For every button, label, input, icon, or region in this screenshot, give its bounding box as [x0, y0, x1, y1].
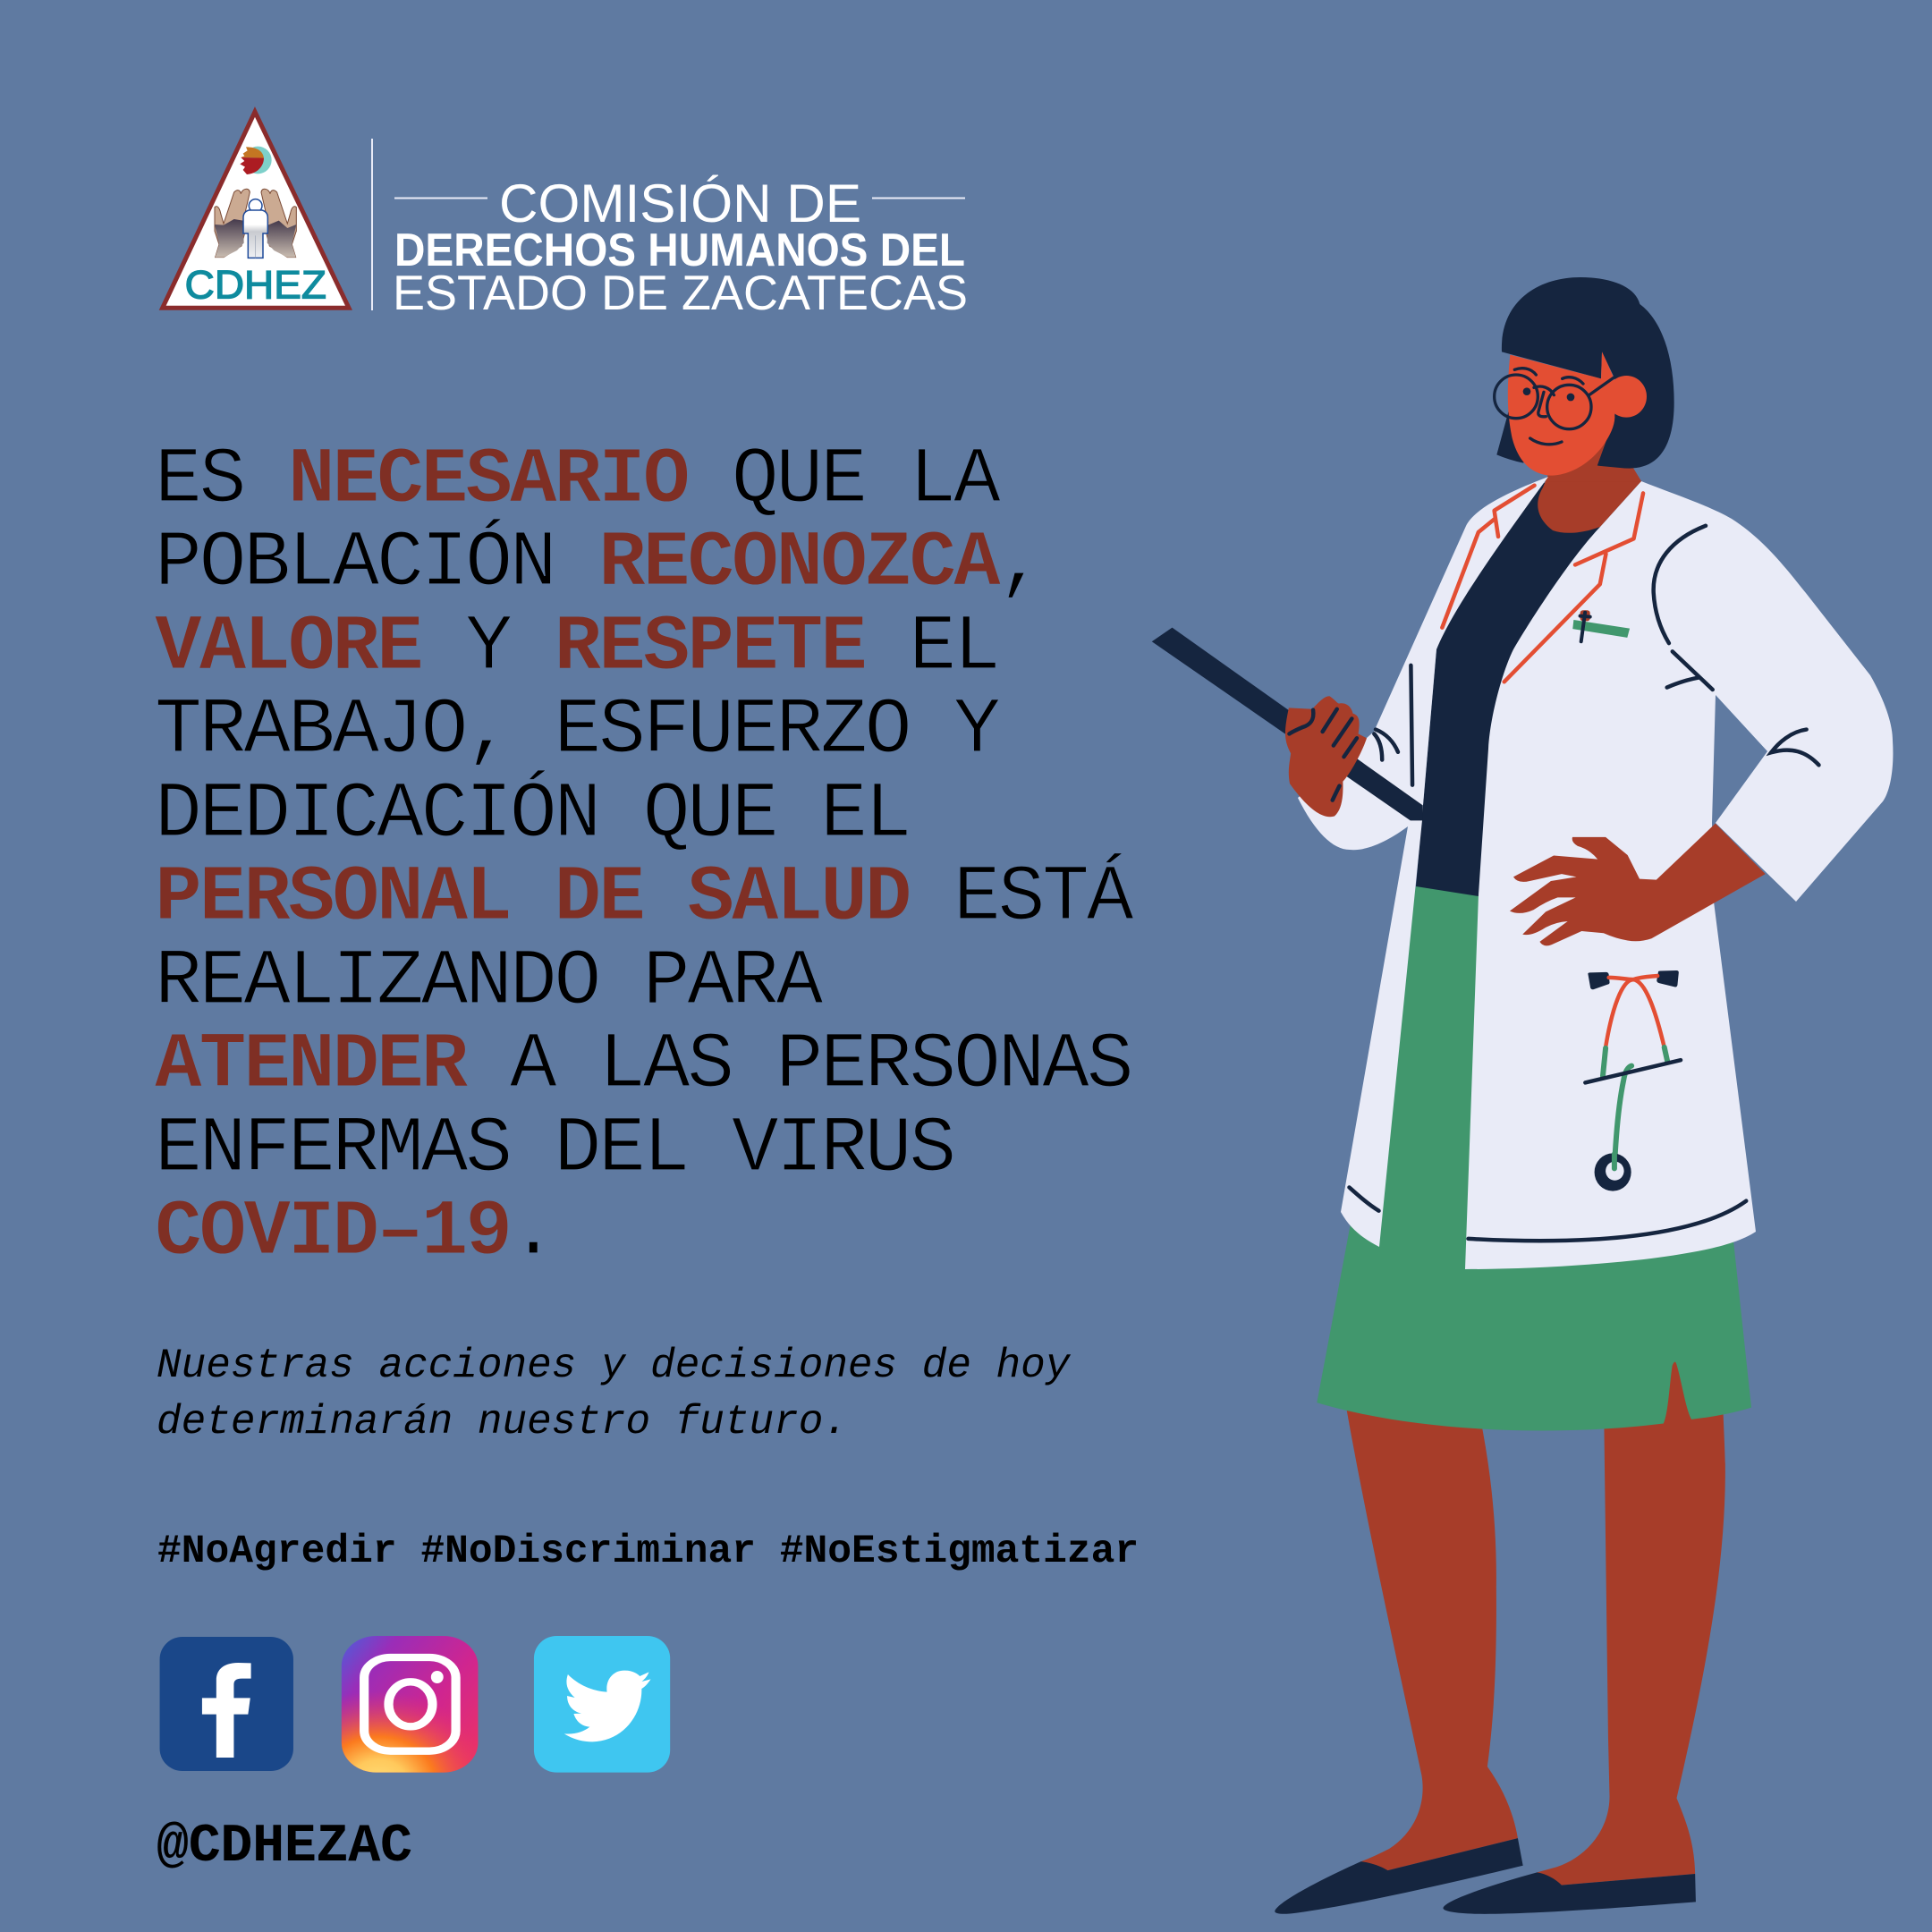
logo wordmark: CDHEZ — [185, 263, 326, 307]
icon: facebook — [160, 1637, 293, 1771]
pocket — [1572, 620, 1630, 638]
logo: CDHEZ triangle — [163, 112, 349, 308]
pen — [1580, 610, 1590, 641]
logo triangle outline — [163, 112, 349, 308]
main message: TRABAJO, ESFUERZO Y — [155, 687, 1000, 775]
header line 1: COMISIÓN DE — [499, 174, 861, 233]
legs and shoes — [1275, 1344, 1725, 1914]
main message: DEDICACIÓN QUE EL — [155, 770, 909, 860]
header line 2: DERECHOS HUMANOS DEL — [394, 225, 965, 276]
main message: PERSONAL DE SALUD ESTÁ — [155, 853, 1134, 943]
main message — [155, 436, 1134, 1277]
doctor illustration — [1152, 277, 1893, 1914]
hair — [1502, 277, 1674, 469]
header rule right — [872, 197, 965, 199]
ear — [1606, 376, 1647, 418]
icon: twitter — [534, 1636, 670, 1773]
tagline: Nuestras acciones y decisiones de hoy — [157, 1343, 1072, 1389]
right arm and hand — [1510, 824, 1766, 945]
logo hands — [215, 189, 296, 258]
clipboard — [1152, 628, 1423, 820]
main message: ATENDER A LAS PERSONAS — [155, 1021, 1131, 1110]
coat fold lines — [1374, 526, 1818, 785]
neck — [1538, 452, 1641, 533]
coat lapels and pocket — [1152, 486, 1818, 820]
hashtags: #NoAgredir #NoDiscriminar #NoEstigmatizar — [157, 1530, 1139, 1574]
icon: instagram — [342, 1636, 478, 1773]
main message: ENFERMAS DEL VIRUS — [155, 1106, 953, 1194]
header: organisation name — [393, 174, 968, 320]
logo sun — [240, 147, 272, 174]
main message: VALORE Y RESPETE EL — [155, 604, 998, 692]
skirt — [1317, 886, 1751, 1431]
logo divider — [371, 139, 373, 310]
eyes — [1523, 387, 1574, 401]
main message: ES NECESARIO QUE LA — [155, 436, 1001, 525]
tagline: determinarán nuestro futuro. — [157, 1399, 848, 1445]
header rule left — [394, 197, 487, 199]
lab coat — [1298, 477, 1893, 1269]
shirt — [1416, 481, 1641, 896]
tagline — [157, 1343, 1072, 1445]
main message: COVID–19. — [155, 1189, 554, 1277]
lower coat details — [1349, 824, 1766, 1241]
glasses and facial features — [1495, 369, 1614, 445]
main message: REALIZANDO PARA — [155, 938, 824, 1027]
coat hem lines — [1349, 1187, 1746, 1241]
social icons — [160, 1636, 670, 1773]
logo person — [243, 199, 267, 258]
social handle: @CDHEZAC — [157, 1817, 412, 1877]
main message: POBLACIÓN RECONOZCA, — [155, 519, 1042, 608]
left hand — [1285, 696, 1367, 817]
neck shadow — [1547, 418, 1641, 481]
lapel lines — [1442, 486, 1643, 682]
hair back left — [1496, 405, 1527, 463]
stethoscope — [1585, 970, 1681, 1191]
head — [1495, 277, 1674, 481]
header line 3: ESTADO DE ZACATECAS — [393, 265, 968, 320]
face — [1508, 352, 1614, 476]
